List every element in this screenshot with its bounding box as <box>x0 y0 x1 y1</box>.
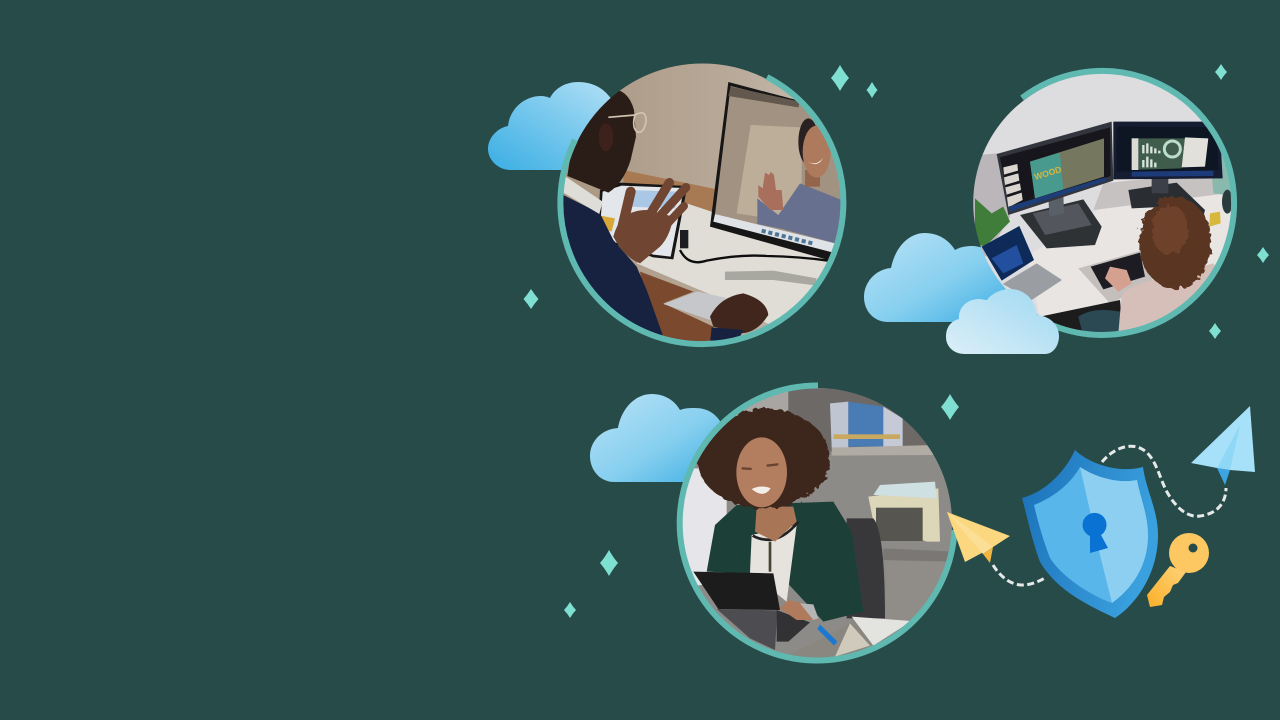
photo: woman at a dual monitor workstation <box>973 74 1231 332</box>
sparkles <box>524 64 1269 618</box>
ring: dual monitor photo <box>1022 71 1234 335</box>
cloud: behind dual monitor photo <box>864 233 1012 322</box>
icon: security shield with keyhole <box>1022 450 1158 618</box>
dashed flight path: yellow plane <box>993 565 1045 585</box>
ring: video call photo <box>560 77 843 344</box>
dashed flight path: blue plane <box>1102 446 1226 516</box>
icon: blue paper plane <box>1191 406 1255 485</box>
cloud: behind tablet photo <box>590 394 730 482</box>
cloud: front small cloud <box>946 289 1059 354</box>
ring: tablet photo <box>680 385 954 660</box>
photo: man on a video call at a desk <box>563 64 840 342</box>
slide title text: WOOD <box>1033 164 1063 182</box>
icon: gold key <box>1147 533 1209 607</box>
keyhole <box>1083 513 1108 553</box>
photo: woman typing on a tablet <box>682 388 952 658</box>
icon: yellow paper plane <box>947 512 1010 563</box>
cloud: behind video call photo <box>488 82 625 170</box>
